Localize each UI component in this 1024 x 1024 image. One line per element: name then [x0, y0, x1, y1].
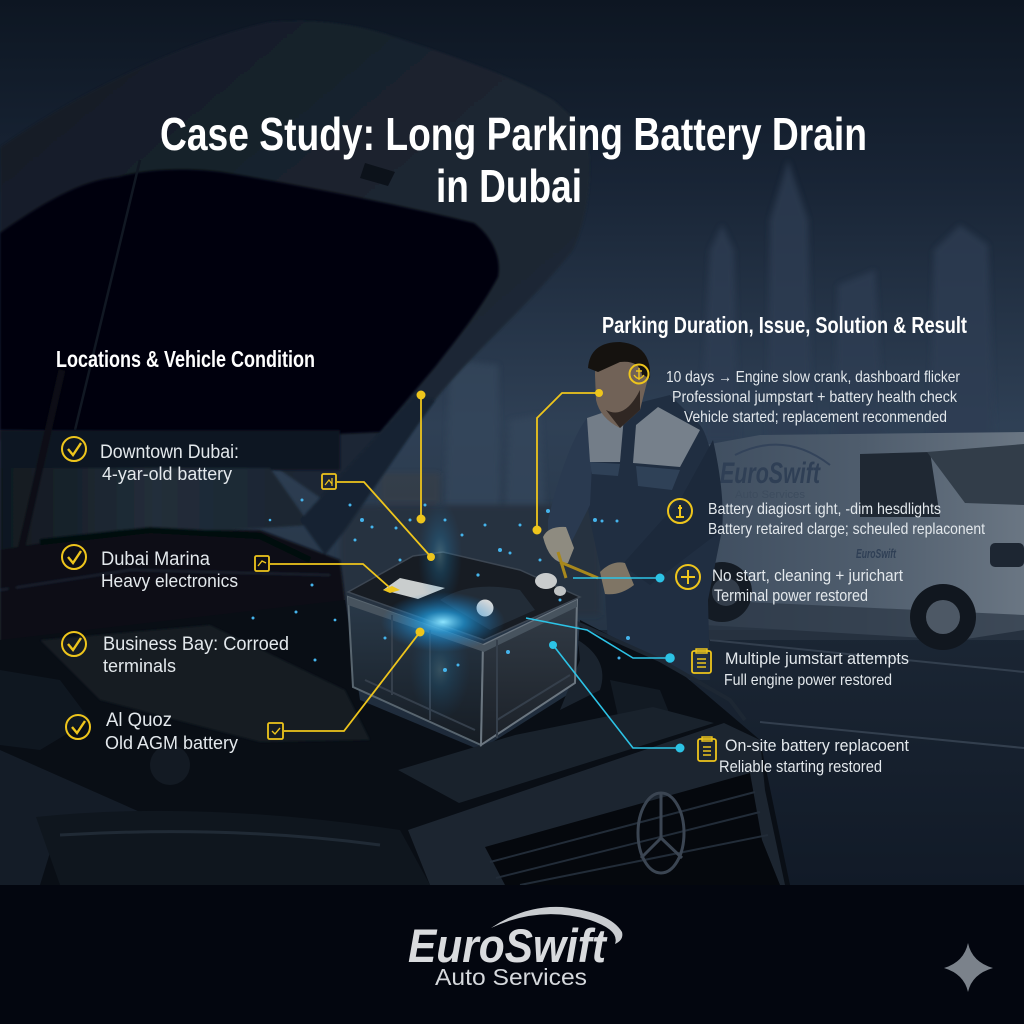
logo [408, 907, 622, 990]
case 5: on-site replacement [698, 736, 909, 776]
item: Downtown Dubai [62, 437, 239, 484]
engine bay [0, 600, 790, 885]
blue leader lines [526, 574, 684, 752]
logo swoosh [491, 907, 622, 944]
item: Al Quoz [66, 710, 238, 753]
case 2: diagnostic light: Battery diagiosrt ight, -dim hesdlights [708, 501, 941, 518]
item: Business Bay: terminals [103, 656, 176, 676]
head [595, 350, 648, 428]
case 5: on-site replacement: On-site battery replacoent [725, 736, 909, 755]
yellow leader lines [270, 389, 603, 731]
blue particles [252, 498, 630, 672]
item: Business Bay [62, 632, 289, 676]
car front [398, 707, 785, 885]
van [692, 432, 1024, 650]
panel: locations list [62, 437, 289, 753]
icon: clipboard [698, 737, 716, 761]
case 1: 10 days: 10 days → Engine slow crank, dashboard flicker [666, 369, 961, 386]
item: Dubai Marina: Dubai Marina [101, 549, 210, 570]
case 1: 10 days [630, 364, 961, 426]
windshield and cowl [0, 370, 435, 650]
hood [0, 21, 590, 515]
skyline towers [445, 160, 994, 510]
case 3: no start: Terminal power restored [714, 586, 868, 605]
battery [348, 552, 580, 745]
energy glow [381, 500, 505, 720]
mechanic [543, 342, 723, 680]
icon: car star badge [638, 793, 684, 873]
footer band [0, 885, 1024, 1024]
title: Case Study: Long Parking Battery Drain [160, 108, 867, 160]
case 1: 10 days: Professional jumpstart + battery health check [672, 389, 958, 406]
case 3: no start: No start, cleaning + jurichart [712, 566, 903, 585]
title [160, 108, 867, 212]
item: Al Quoz: Al Quoz [106, 710, 172, 731]
icon: anchor badge [630, 364, 648, 384]
icon: sparkle star [944, 943, 993, 992]
item: Business Bay: Business Bay: Corroed [103, 634, 289, 655]
logo: Auto Services [435, 964, 587, 990]
van: EuroSwift [856, 546, 896, 561]
icon: info [668, 499, 692, 523]
blurred street behind engine [340, 473, 600, 615]
item: Downtown Dubai: 4-yar-old battery [102, 464, 232, 484]
small icons on leader lines [255, 474, 336, 739]
title: in Dubai [436, 160, 582, 212]
van: EuroSwift [720, 457, 821, 490]
case 4: multiple jumpstarts [692, 649, 909, 689]
case 5: on-site replacement: Reliable starting restored [719, 757, 882, 776]
case 2: diagnostic light [668, 499, 985, 538]
icon: plus [676, 565, 700, 589]
heading: locations: Locations & Vehicle Condition [56, 346, 315, 372]
logo: EuroSwift [408, 919, 608, 972]
case 2: diagnostic light: Battery retaired clarge; scheuled replaconent [708, 521, 985, 538]
van: Auto Services [735, 489, 806, 501]
case 4: multiple jumpstarts: Multiple jumstart attempts [725, 649, 909, 668]
case 1: 10 days: Vehicle started; replacement reconmended [684, 409, 947, 426]
item: Dubai Marina: Heavy electronics [101, 571, 238, 591]
item: Al Quoz: Old AGM battery [105, 733, 238, 753]
parking ground [600, 630, 1024, 885]
item: Downtown Dubai: Downtown Dubai: [100, 442, 239, 463]
icon: clipboard [692, 649, 711, 673]
item: Dubai Marina [62, 545, 238, 591]
case 4: multiple jumpstarts: Full engine power restored [724, 672, 892, 689]
case 3: no start [676, 565, 903, 605]
